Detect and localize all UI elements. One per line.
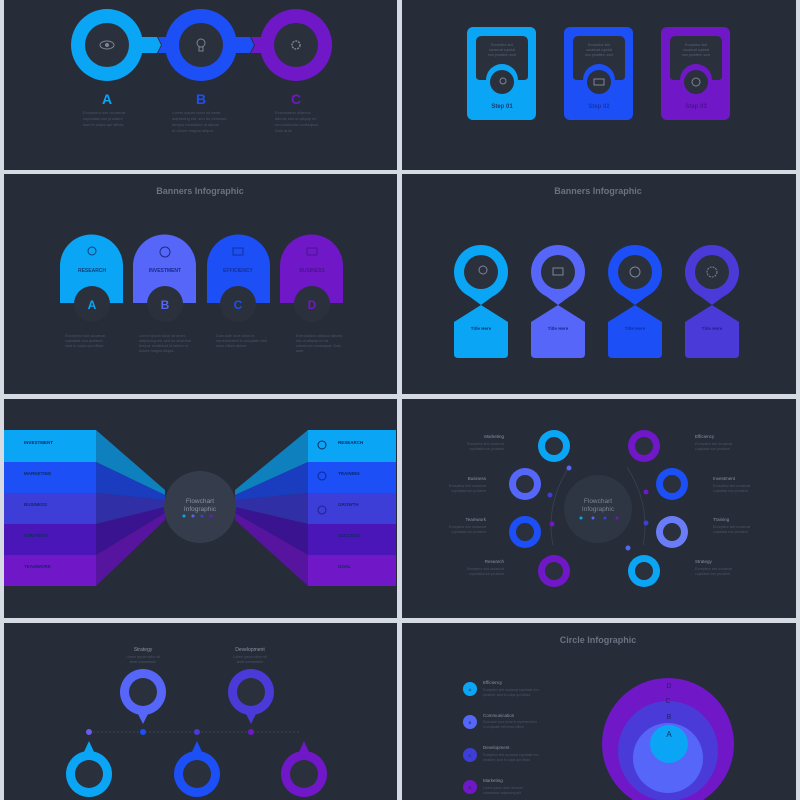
center circle: Flowchart — [584, 498, 612, 505]
arch B investment — [133, 234, 196, 322]
legend: in voluptate velit esse cillum — [483, 725, 524, 729]
dots — [548, 466, 648, 550]
descriptions: adipiscing elit, sed do eiusmod — [139, 339, 191, 343]
descriptions: cupidatat non proident — [65, 339, 104, 343]
descriptions: laboris nisi ut aliquip ex — [275, 116, 316, 121]
descriptions: reprehenderit in voluptate velit — [216, 339, 268, 343]
center circle: Flowchart — [186, 498, 214, 505]
title: Banners Infographic — [554, 186, 642, 196]
panel: slide 6 radial flowchart: cupidatat non proident — [469, 447, 504, 451]
title: Circle Infographic — [560, 635, 636, 645]
rings — [509, 430, 688, 587]
legend: B — [469, 720, 472, 725]
panel: slide 7 timeline pins: Lorem ipsum dolor sit — [126, 655, 160, 659]
ring B — [165, 9, 237, 81]
concentric circles: A — [666, 730, 672, 739]
descriptions: sunt in culpa qui officia — [83, 122, 124, 127]
legend: A — [469, 687, 472, 692]
labels: Training — [713, 517, 730, 522]
labels: Efficiency — [695, 434, 715, 439]
left bars: TEAMWORK — [24, 564, 52, 569]
descriptions: tempor incididunt ut labore — [172, 122, 220, 127]
legend: proident, sunt in culpa qui officia — [483, 758, 530, 762]
panel: slide 3 banners arches — [4, 174, 397, 394]
card step 01: Excepteur sint — [491, 43, 513, 47]
descriptions: nisi ut aliquip ex ea — [296, 339, 329, 343]
descriptions: esse cillum dolore. — [216, 344, 247, 348]
legend: Efficiency — [483, 680, 503, 685]
left bars: BUSINESS — [24, 502, 47, 507]
right bars: SUCCESS — [338, 533, 360, 538]
ring C — [260, 9, 332, 81]
arch C efficiency: EFFICIENCY — [223, 268, 254, 274]
panel: slide 7 timeline pins: Lorem ipsum dolor sit — [233, 655, 267, 659]
arch B investment: B — [161, 298, 170, 312]
card step 03 — [661, 27, 730, 120]
labels: Teamwork — [465, 517, 487, 522]
card step 02: Excepteur sint — [588, 43, 610, 47]
connector arrows — [140, 37, 265, 53]
right bars — [308, 430, 396, 586]
panel: slide 1 steps A B C — [4, 0, 397, 170]
legend: D — [469, 785, 472, 790]
card step 02: non proident, sunt — [585, 53, 613, 57]
panel: slide 6 radial flowchart: cupidatat non proident — [695, 447, 730, 451]
panel: slide 6 radial flowchart: Excepteur sint occaecat — [467, 442, 504, 446]
arch B investment: INVESTMENT — [149, 268, 181, 274]
panel: slide 4 banners pins — [402, 174, 796, 394]
center circle: Infographic — [184, 506, 217, 513]
descriptions: Excepteur sint occaecat — [65, 334, 106, 338]
concentric circles: D — [666, 683, 672, 690]
panel: slide 7 timeline pins — [4, 623, 397, 800]
descriptions: Duis aute irure dolor in — [216, 334, 254, 338]
funnel left — [96, 430, 165, 586]
legend: Lorem ipsum dolor sit amet — [483, 786, 523, 790]
letters: A — [102, 91, 112, 107]
panel: slide 7 timeline pins: amet consectetur — [237, 660, 264, 664]
concentric circles: B — [667, 714, 672, 721]
descriptions: commodo consequat. Duis — [296, 344, 341, 348]
center circle — [564, 475, 632, 543]
letters — [102, 91, 301, 107]
descriptions: et dolore magna aliqua. — [172, 128, 214, 133]
ring A — [71, 9, 143, 81]
legend — [463, 680, 539, 795]
arch A research: RESEARCH — [78, 268, 106, 274]
arch A research — [60, 234, 123, 322]
descriptions: Lorem ipsum dolor sit amet, — [139, 334, 186, 338]
right bars: TRAINING — [338, 471, 360, 476]
descriptions: tempor incididunt ut labore et — [139, 344, 189, 348]
legend: Excepteur sint occaecat cupidatat non — [483, 688, 539, 692]
descriptions: Duis aute — [275, 128, 293, 133]
labels: Research — [485, 559, 504, 564]
panel: slide 6 radial flowchart: cupidatat non proident — [469, 572, 504, 576]
panel: slide 6 radial flowchart: cupidatat non proident — [451, 489, 486, 493]
panel: slide 6 radial flowchart: Excepteur sint occaecat — [713, 484, 750, 488]
legend: Excepteur sint occaecat cupidatat non — [483, 753, 539, 757]
descriptions: cupidatat non proident — [83, 116, 123, 121]
arch C efficiency: C — [234, 298, 243, 312]
pin 1 — [454, 245, 508, 358]
panel: slide 6 radial flowchart: cupidatat non proident — [713, 489, 748, 493]
center circle: Infographic — [582, 506, 615, 513]
descriptions: Exercitation ullamco — [275, 110, 312, 115]
right bars: GROWTH — [338, 502, 358, 507]
descriptions: ea commodo consequat. — [275, 122, 319, 127]
pin 4: Title Here — [702, 326, 723, 331]
card step 01 — [467, 27, 536, 120]
labels: Marketing — [484, 434, 504, 439]
panel: slide 6 radial flowchart: Excepteur sint occaecat — [695, 567, 732, 571]
arch D business: BUSINESS — [299, 268, 325, 274]
letters: B — [196, 91, 206, 107]
legend: Development — [483, 745, 510, 750]
card step 02: occaecat cupidat — [586, 48, 612, 52]
descriptions: Exercitation ullamco laboris — [296, 334, 342, 338]
labels — [134, 647, 265, 653]
card step 03: non proident, sunt — [682, 53, 710, 57]
letters: C — [291, 91, 301, 107]
pin 1: Title Here — [471, 326, 492, 331]
legend: Marketing — [483, 778, 503, 783]
arch D business: D — [308, 298, 317, 312]
dotted line — [89, 731, 300, 733]
left bars: INVESTMENT — [24, 440, 53, 445]
concentric circles: C — [665, 698, 671, 705]
descriptions: aute — [296, 349, 303, 353]
card step 01: non proident, sunt — [488, 53, 516, 57]
descriptions: adipiscing elit, sed do eiusmod — [172, 116, 226, 121]
labels — [465, 434, 736, 564]
arcs — [551, 467, 645, 545]
left bars — [4, 430, 96, 586]
panel: slide 6 radial flowchart: cupidatat non proident — [451, 530, 486, 534]
funnel right — [235, 430, 308, 586]
descriptions: dolore magna aliqua. — [139, 349, 174, 353]
pin 3: Title Here — [625, 326, 646, 331]
panel: slide 8 circle infographic — [402, 623, 796, 800]
panel: slide 6 radial flowchart: Excepteur sint occaecat — [467, 567, 504, 571]
arch D business — [280, 234, 343, 322]
arch A research: A — [88, 298, 97, 312]
pin 3 — [608, 245, 662, 358]
panel: slide 6 radial flowchart: Excepteur sint occaecat — [695, 442, 732, 446]
dots — [86, 729, 254, 735]
panel: slide 6 radial flowchart: Excepteur sint occaecat — [449, 525, 486, 529]
top pins — [120, 669, 274, 724]
panel: slide 6 radial flowchart: cupidatat non proident — [695, 572, 730, 576]
panel: slide 6 radial flowchart — [402, 399, 796, 618]
pin 4 — [685, 245, 739, 358]
panel: slide 6 radial flowchart: Excepteur sint occaecat — [449, 484, 486, 488]
labels: Development — [235, 647, 265, 653]
descriptions — [83, 110, 319, 133]
labels: Business — [468, 476, 487, 481]
legend: C — [469, 753, 472, 758]
center circle — [164, 471, 236, 543]
descriptions: Excepteur sint occaecat — [83, 110, 126, 115]
panel: slide 6 radial flowchart: cupidatat non proident — [713, 530, 748, 534]
panel: slide 6 radial flowchart: Excepteur sint occaecat — [713, 525, 750, 529]
panel: slide 7 timeline pins: amet consectetur — [130, 660, 157, 664]
legend: proident, sunt in culpa qui officia — [483, 693, 530, 697]
card step 03: Excepteur sint — [685, 43, 707, 47]
labels: Investment — [713, 476, 736, 481]
legend: Communication — [483, 713, 515, 718]
card step 01: occaecat cupidat — [489, 48, 515, 52]
right bars: GOAL — [338, 564, 351, 569]
card step 03: occaecat cupidat — [683, 48, 709, 52]
pin 2 — [531, 245, 585, 358]
legend: consectetur adipiscing elit — [483, 791, 521, 795]
descriptions: sunt in culpa qui officia — [65, 344, 104, 348]
card step 02: Step 02 — [588, 104, 610, 110]
labels: Strategy — [134, 647, 153, 653]
card step 03: Step 03 — [685, 104, 707, 110]
left bars: STRATEGY — [24, 533, 48, 538]
right bars: RESEARCH — [338, 440, 363, 445]
legend: Duis aute irure dolor in reprehenderit — [483, 720, 537, 724]
arch C efficiency — [207, 234, 270, 322]
descriptions — [65, 334, 342, 353]
panel: slide 5 flowchart bars — [4, 399, 397, 618]
card step 01: Step 01 — [491, 104, 513, 110]
left bars: MARKETING — [24, 471, 52, 476]
descriptions: Lorem ipsum dolor sit amet, — [172, 110, 221, 115]
panel: slide 2 step cards — [402, 0, 796, 170]
concentric circles — [602, 678, 734, 800]
card step 02 — [564, 27, 633, 120]
title: Banners Infographic — [156, 186, 244, 196]
labels: Strategy — [695, 559, 713, 564]
pin 2: Title Here — [548, 326, 569, 331]
bottom pins — [66, 741, 327, 797]
